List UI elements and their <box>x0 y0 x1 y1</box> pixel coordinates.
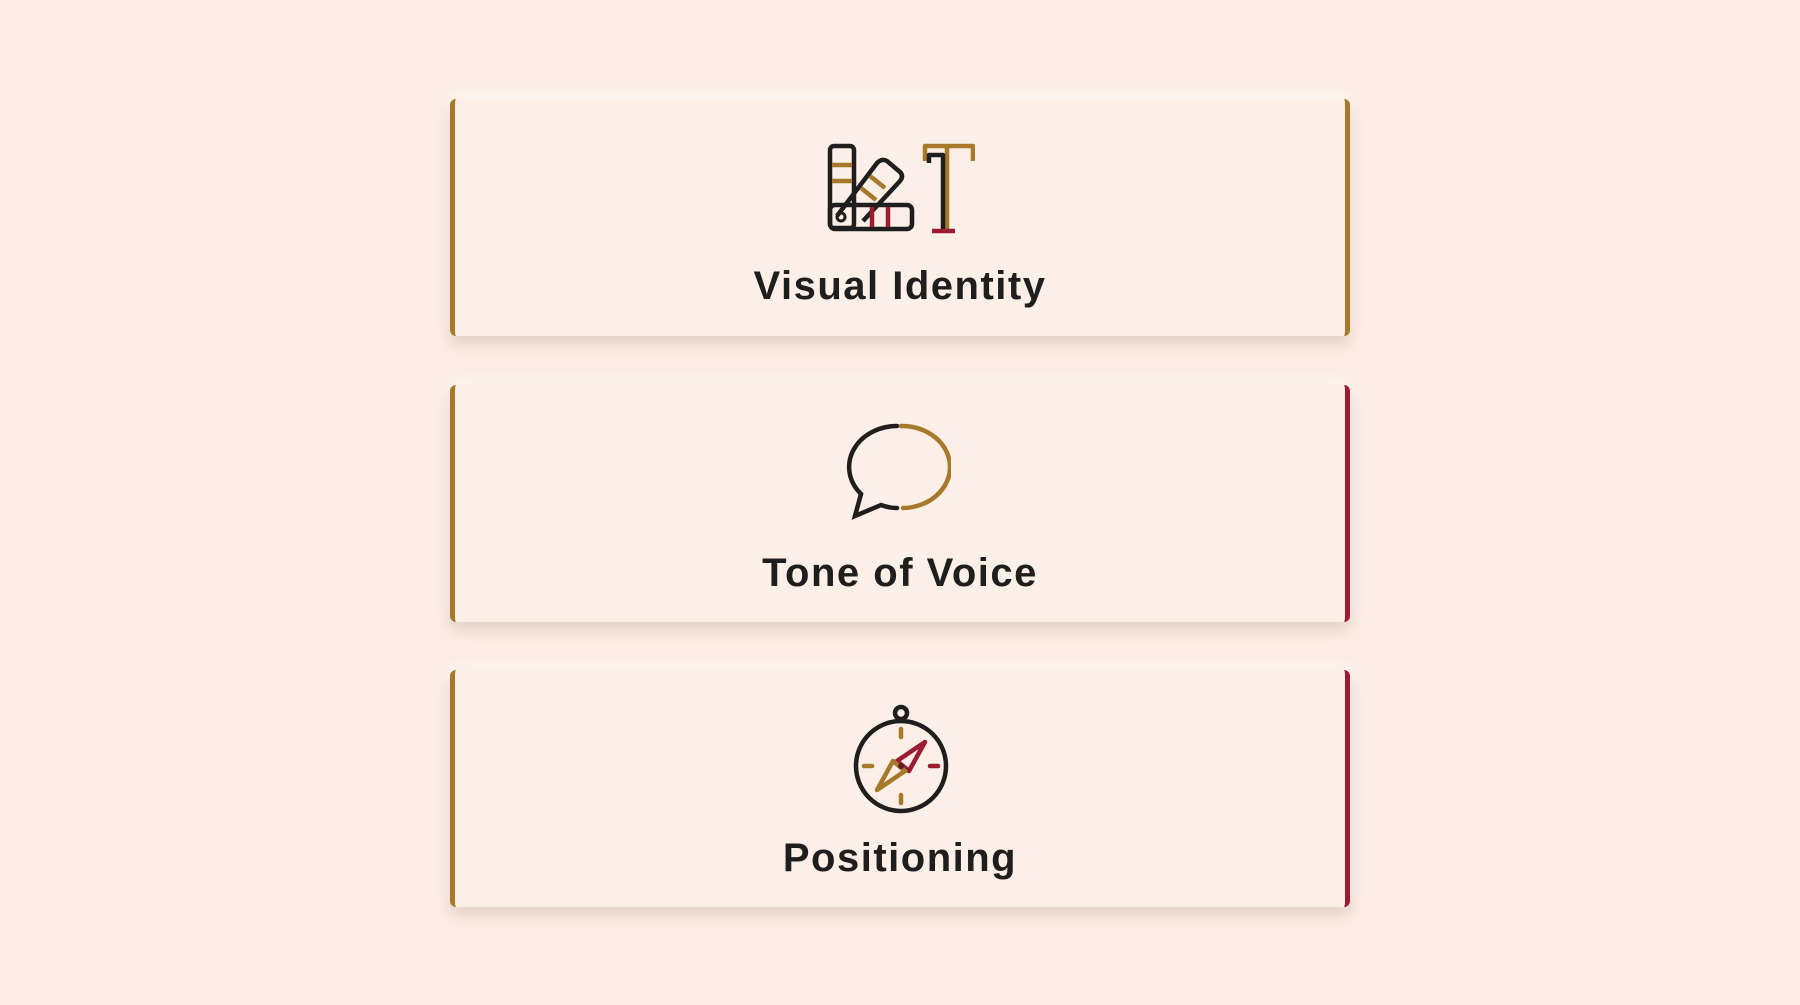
label: Visual Identity: Visual Identity <box>754 264 1046 308</box>
card: visual identity <box>450 99 1350 336</box>
label: Tone of Voice: Tone of Voice <box>762 551 1038 595</box>
card: tone of voice <box>450 385 1350 622</box>
card: positioning <box>450 670 1350 907</box>
icon: swatch and type <box>828 144 975 234</box>
icon: speech bubble <box>846 424 951 520</box>
label: Positioning: Positioning <box>783 836 1017 880</box>
icon: compass <box>854 704 948 814</box>
